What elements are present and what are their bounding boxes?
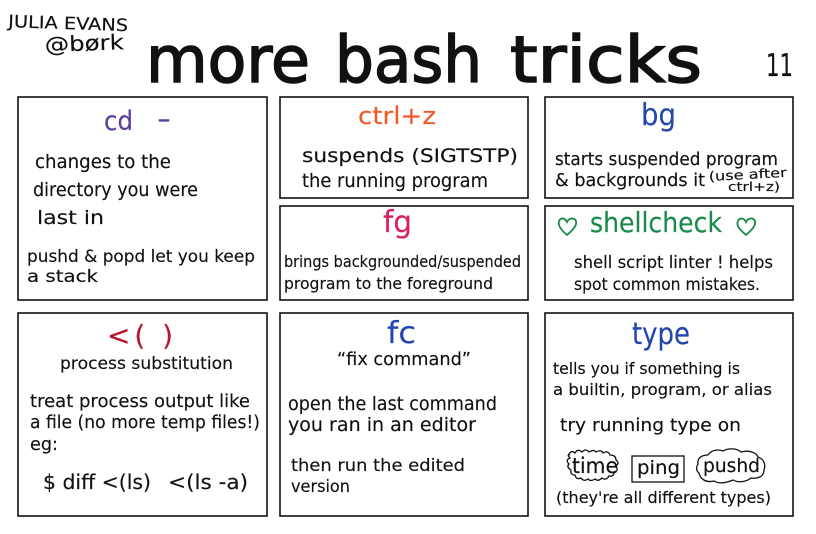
body text: suspends (SIGTSTP) bbox=[302, 145, 518, 167]
body text: & backgrounds it bbox=[555, 170, 705, 191]
note: use after ctrl+z: (use after bbox=[708, 166, 788, 185]
body text bbox=[288, 393, 497, 436]
panel: fc bbox=[280, 313, 528, 516]
command example: <(ls -a) bbox=[168, 470, 248, 494]
body text: treat process output like bbox=[30, 391, 250, 412]
body text: program to the foreground bbox=[284, 274, 493, 293]
heading: shellcheck: shellcheck bbox=[590, 206, 723, 239]
body text: the running program bbox=[302, 170, 488, 192]
box: ping: ping bbox=[637, 457, 680, 479]
body text bbox=[284, 252, 521, 293]
body text bbox=[302, 145, 518, 192]
heading: cd -: - bbox=[157, 104, 171, 135]
heading: <( ): <( ) bbox=[107, 319, 173, 352]
title bbox=[146, 24, 702, 98]
body text: shell script linter ! helps bbox=[574, 253, 773, 273]
author credit bbox=[7, 12, 128, 57]
body text: changes to the bbox=[35, 151, 171, 173]
heading: cd - bbox=[104, 104, 171, 137]
body text: open the last command bbox=[288, 393, 497, 415]
note: use after ctrl+z: ctrl+z) bbox=[728, 180, 780, 194]
command example bbox=[43, 470, 248, 494]
page number: 11 bbox=[766, 48, 793, 84]
body text: you ran in an editor bbox=[288, 414, 476, 436]
title: more bbox=[146, 24, 310, 98]
command example: $ diff <(ls) bbox=[43, 470, 151, 494]
body text bbox=[553, 359, 772, 399]
box: ping bbox=[632, 456, 684, 482]
heading: cd -: cd bbox=[104, 106, 133, 137]
body text: directory you were bbox=[33, 179, 198, 201]
body text: a file (no more temp files!) bbox=[30, 412, 260, 433]
subheading: “fix command” bbox=[337, 349, 471, 370]
heading: ctrl+z: ctrl+z bbox=[358, 102, 436, 130]
prompt text: try running type on bbox=[560, 415, 741, 436]
body text: a builtin, program, or alias bbox=[553, 380, 772, 399]
body text bbox=[30, 391, 260, 455]
body text: starts suspended program bbox=[555, 149, 778, 170]
icon: right heart bbox=[737, 218, 755, 235]
panel: fg bbox=[280, 205, 528, 300]
body text: last in bbox=[37, 207, 104, 229]
note: pushd and popd: a stack bbox=[27, 267, 98, 287]
panel: bg bbox=[545, 97, 793, 198]
panel: process substitution bbox=[18, 313, 267, 516]
body text: brings backgrounded/suspended bbox=[284, 252, 521, 271]
spiky cloud: time: time bbox=[572, 454, 618, 478]
author credit: @børk bbox=[44, 30, 125, 57]
caption: (they're all different types) bbox=[556, 488, 771, 507]
body text: tells you if something is bbox=[553, 359, 740, 378]
note: version bbox=[291, 477, 350, 497]
heading: type: type bbox=[632, 317, 690, 352]
cloud: pushd bbox=[697, 449, 765, 483]
body text bbox=[574, 253, 773, 295]
spiky cloud: time bbox=[567, 450, 618, 480]
note: pushd and popd: pushd & popd let you keep bbox=[27, 247, 255, 267]
note bbox=[291, 456, 465, 497]
subheading: process substitution bbox=[60, 354, 233, 374]
cloud: pushd: pushd bbox=[703, 455, 760, 477]
body text: eg: bbox=[30, 434, 58, 455]
body text bbox=[555, 149, 778, 191]
panel: cd - bbox=[18, 97, 267, 300]
body text: spot common mistakes. bbox=[574, 275, 760, 295]
heading: fc: fc bbox=[387, 316, 416, 351]
panel: ctrl+z bbox=[280, 97, 528, 198]
note: pushd and popd bbox=[27, 247, 255, 287]
heading: fg: fg bbox=[383, 205, 412, 240]
author credit: JULIA EVANS bbox=[7, 12, 128, 36]
panel: type bbox=[545, 313, 793, 516]
panel: shellcheck bbox=[545, 206, 793, 300]
note: then run the edited bbox=[291, 456, 465, 476]
title: tricks bbox=[510, 24, 702, 98]
heading: bg: bg bbox=[641, 98, 676, 133]
body text bbox=[33, 151, 198, 229]
title: bash bbox=[335, 24, 482, 98]
icon: left heart bbox=[559, 218, 576, 235]
note: use after ctrl+z bbox=[708, 166, 788, 194]
